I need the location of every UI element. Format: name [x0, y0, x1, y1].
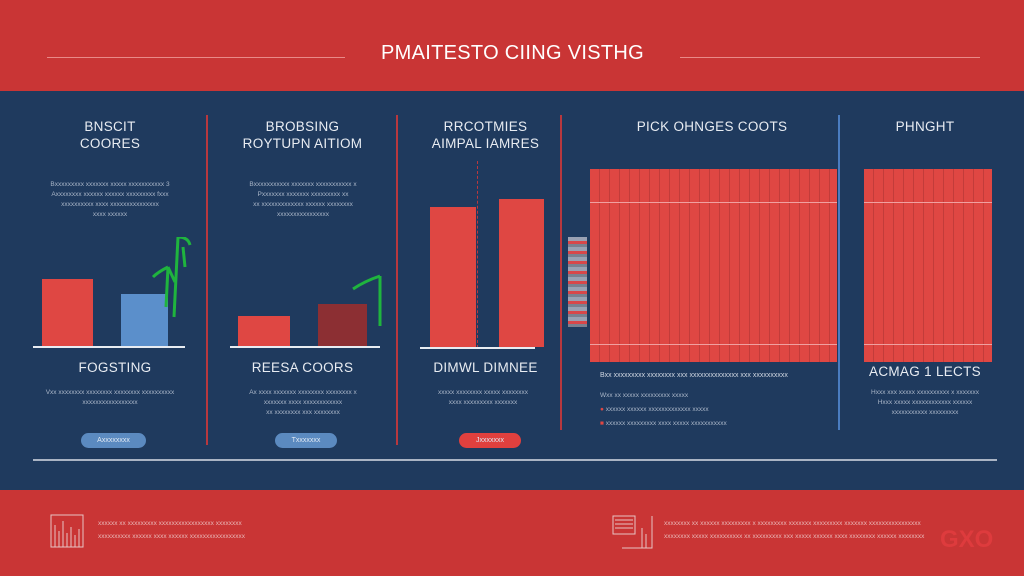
- description 1: Bxxxxxxxxx xxxxxxx xxxxx xxxxxxxxxxx 3: [50, 181, 170, 188]
- icon: footer chart 1: [50, 514, 84, 548]
- footer text 2: [664, 520, 924, 540]
- subheading 1: FOGSTING: [79, 360, 151, 375]
- heading 1: [80, 119, 140, 151]
- button 2: Txxxxxxx: [292, 437, 320, 444]
- description 1: xxxxxxxxxx xxxx xxxxxxxxxxxxxxx: [61, 201, 159, 208]
- heading 2: [243, 119, 362, 151]
- top banner: [0, 0, 1024, 91]
- sub description 2: [249, 389, 357, 416]
- sub description 1: Vxx xxxxxxxx xxxxxxxx xxxxxxxx xxxxxxxxxx: [46, 389, 174, 396]
- panel 4: big chart: [568, 119, 837, 427]
- description 5: Hxxx xxxxx xxxxxxxxxxxx xxxxxx: [878, 399, 972, 406]
- description 1: xxxx xxxxxx: [93, 211, 127, 218]
- heading 3: AIMPAL IAMRES: [432, 136, 539, 151]
- subheading 2: REESA COORS: [252, 360, 353, 375]
- footer band: [0, 490, 1024, 576]
- icon: green arrow: [352, 274, 382, 326]
- description 2: [249, 181, 357, 218]
- heading 4: PICK OHNGES COOTS: [637, 119, 787, 134]
- heading 1: COORES: [80, 136, 140, 151]
- chart caption: Bxx xxxxxxxxx xxxxxxxx xxx xxxxxxxxxxxxxx xxx xxxxxxxxxx: [600, 372, 788, 379]
- sub description 2: Ax xxxx xxxxxxx xxxxxxxx xxxxxxxx x: [249, 389, 357, 396]
- sub description 3: [438, 389, 528, 406]
- icon: green arrows: [152, 237, 192, 318]
- bullet list: ■ xxxxxx xxxxxxxxx xxxx xxxxx xxxxxxxxxxx: [600, 420, 727, 427]
- heading 5: PHNGHT: [896, 119, 954, 134]
- button 3: [459, 433, 521, 448]
- description 5: Hxxx xxx xxxxx xxxxxxxxxx x xxxxxxx: [871, 389, 979, 396]
- description 2: xxxxxxxxxxxxxxxx: [277, 211, 329, 218]
- heading 3: RRCOTMIES: [444, 119, 527, 134]
- footer text 2: xxxxxxxx xxxxx xxxxxxxxxx xx xxxxxxxxx xxx xxxxx xxxxxx xxxx xxxxxxxx xxxxxx xxxxxxxx: [664, 533, 924, 540]
- title: PMAITESTO CIING VISTHG: [381, 42, 644, 64]
- heading 2: ROYTUPN AITIOM: [243, 136, 362, 151]
- heading 2: BROBSING: [266, 119, 339, 134]
- sub description 3: xxxx xxxxxxxxx xxxxxxx: [449, 399, 517, 406]
- description 5: [871, 389, 979, 416]
- button 1: Axxxxxxxx: [97, 437, 130, 444]
- watermark logo: GXO: [940, 526, 993, 553]
- sub description 2: xx xxxxxxxx xxx xxxxxxxx: [266, 409, 340, 416]
- panel 2: [230, 119, 382, 448]
- bullet list: Wxx xx xxxxx xxxxxxxxx xxxxx: [600, 392, 688, 399]
- subheading 3: DIMWL DIMNEE: [433, 360, 538, 375]
- panel 5: [864, 119, 992, 416]
- description 1: Axxxxxxxx xxxxxx xxxxxx xxxxxxxxx fxxx: [51, 191, 169, 198]
- icon: footer chart 2: [612, 516, 652, 548]
- sub description 1: xxxxxxxxxxxxxxxxx: [82, 399, 138, 406]
- sub description 1: [46, 389, 174, 406]
- description 1: [50, 181, 170, 218]
- description 2: Bxxxxxxxxxxx xxxxxxx xxxxxxxxxxx x: [249, 181, 357, 188]
- heading 3: [432, 119, 539, 151]
- description 2: xx xxxxxxxxxxxxx xxxxxx xxxxxxxx: [253, 201, 353, 208]
- subheading 5: ACMAG 1 LECTS: [869, 364, 981, 379]
- footer text 1: [98, 520, 245, 540]
- sub description 2: xxxxxxx xxxx xxxxxxxxxxxx: [264, 399, 342, 406]
- column chart 5: [864, 169, 992, 362]
- heading 1: BNSCIT: [84, 119, 136, 134]
- button 2: [275, 433, 337, 448]
- footer text 1: xxxxxxxxxx xxxxxx xxxx xxxxxx xxxxxxxxxxxxxxxxx: [98, 533, 245, 540]
- bar chart 3: [420, 161, 544, 349]
- bar chart 2: [230, 274, 382, 348]
- description 2: Pxxxxxxx xxxxxxx xxxxxxxxx xx: [257, 191, 348, 198]
- footer text 1: xxxxxx xx xxxxxxxxx xxxxxxxxxxxxxxxxx xxxxxxxx: [98, 520, 242, 527]
- bar chart 1: [33, 237, 192, 348]
- button 1: [81, 433, 146, 448]
- button 3: Jxxxxxxx: [476, 437, 504, 444]
- footer text 2: xxxxxxxx xx xxxxxx xxxxxxxxx x xxxxxxxxx xxxxxxx xxxxxxxxx xxxxxxx xxxxxxxxxxxxxxxx: [664, 520, 921, 527]
- description 5: xxxxxxxxxxx xxxxxxxxx: [892, 409, 958, 416]
- bullet list: ● xxxxxx xxxxxx xxxxxxxxxxxxx xxxxx: [600, 406, 709, 413]
- sub description 3: xxxxx xxxxxxxx xxxxx xxxxxxxx: [438, 389, 528, 396]
- panel 1: [33, 119, 192, 448]
- legend stripe: [568, 237, 587, 327]
- panel 3: [420, 119, 544, 448]
- column chart: [590, 169, 837, 362]
- bullet list: [600, 392, 727, 427]
